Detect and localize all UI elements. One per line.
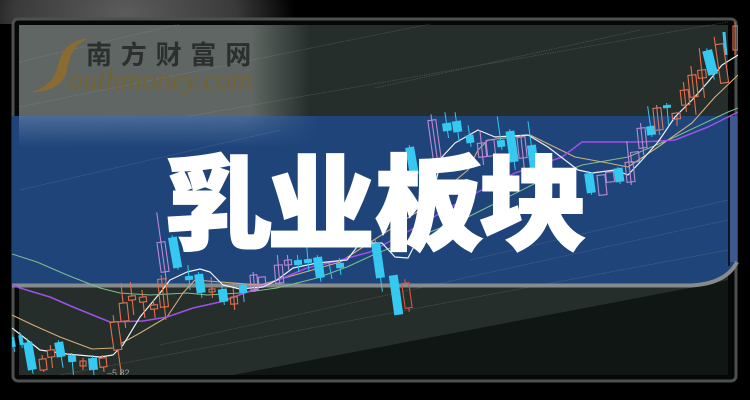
grey strip under band [12, 262, 737, 286]
logo swoosh S [32, 38, 90, 92]
title: 板 [375, 149, 483, 263]
blue title band [12, 116, 738, 284]
purple hollow candles [153, 105, 681, 292]
dark lower-right wedge [233, 280, 728, 375]
moving averages [12, 55, 738, 357]
title [165, 149, 587, 263]
title: 乳 [165, 149, 273, 263]
price label: –5.82 [107, 368, 130, 378]
title: 业 [267, 149, 375, 263]
logo: southmoney [32, 38, 260, 96]
title: 块 [479, 149, 587, 263]
logo chinese name: 南方财富网 [86, 40, 260, 70]
logo haze overlay [19, 25, 310, 116]
logo domain: outhmoney.com [68, 64, 252, 96]
